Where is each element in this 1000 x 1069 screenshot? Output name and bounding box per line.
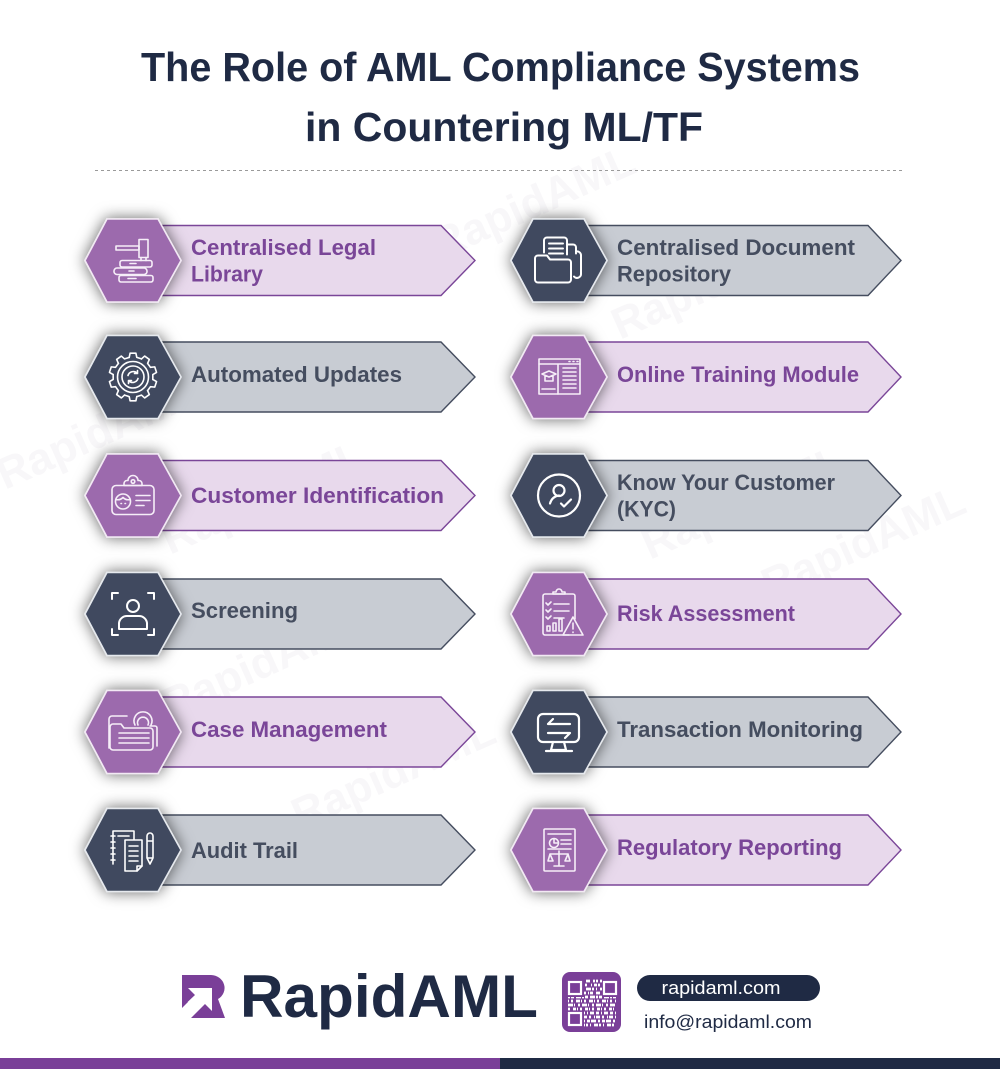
panel: Regulatory Reporting: Regulatory Reporting (617, 835, 842, 860)
panel: Case Management: Case Management (191, 717, 388, 742)
website pill: rapidaml.com (662, 978, 780, 998)
panel: Centralised Document Repository: Repository (617, 262, 732, 286)
panel: Transaction Monitoring (511, 690, 901, 774)
background watermarks: RapidAML (424, 136, 643, 269)
background watermarks (0, 136, 973, 839)
panel: Automated Updates: Automated Updates (191, 362, 402, 387)
background watermarks: RapidAML (634, 436, 853, 569)
panel: Know Your Customer (KYC): (KYC) (617, 496, 676, 522)
icon: document folder (535, 238, 581, 282)
icon: notebook, document and pencil (111, 831, 153, 871)
panel: Customer Identification: Customer Identification (191, 483, 444, 508)
panel: Centralised Legal Library: Library (191, 262, 264, 286)
panel: Centralised Document Repository (511, 219, 901, 302)
background watermarks: RapidAML (604, 216, 823, 349)
logo: RapidAML: RapidAML (240, 963, 538, 1030)
panel: Case Management (85, 690, 475, 774)
icon: logo mark (177, 975, 225, 1022)
title: The Role of AML Compliance Systems (141, 44, 860, 90)
footer bar (0, 1058, 1000, 1069)
panel: Customer Identification (85, 454, 475, 537)
panel: Online Training Module (511, 336, 901, 418)
icon: face scan person (112, 593, 154, 635)
icon: report with scales (544, 829, 575, 871)
icon: online course window (539, 359, 580, 394)
panel: Audit Trail (85, 808, 475, 892)
panel: Centralised Legal Library (85, 219, 475, 302)
background watermarks: RapidAML (154, 596, 373, 729)
icon: ID badge (112, 476, 154, 514)
title (141, 44, 860, 150)
panel: Online Training Module: Online Training Module (617, 362, 859, 387)
panel: Screening (85, 572, 475, 656)
icon: folder with gear (109, 712, 157, 750)
icon: gear with refresh arrows (108, 353, 158, 401)
QR code (562, 972, 621, 1032)
panel: Centralised Legal Library: Centralised Legal (191, 235, 376, 260)
panel: Know Your Customer (KYC) (511, 454, 901, 537)
title: in Countering ML/TF (305, 104, 703, 150)
background watermarks: RapidAML (754, 476, 973, 609)
panel: Centralised Document Repository: Centralised Document (617, 235, 856, 260)
panel: Transaction Monitoring: Transaction Monitoring (617, 717, 863, 742)
panel: Know Your Customer (KYC): Know Your Customer (617, 470, 835, 495)
icon: clipboard risk chart (543, 589, 583, 635)
background watermarks: RapidAML (154, 431, 373, 564)
icon: verified customer (538, 474, 580, 516)
panel: Screening: Screening (191, 598, 298, 623)
email text: info@rapidaml.com (644, 1012, 812, 1032)
panel: Audit Trail: Audit Trail (191, 838, 298, 863)
website pill (637, 975, 820, 1001)
background watermarks: RapidAML (284, 706, 503, 839)
panel: Regulatory Reporting (511, 808, 901, 892)
panel: Risk Assessment (511, 572, 901, 656)
panel: Automated Updates (85, 336, 475, 418)
icon: monitor with exchange arrows (538, 714, 579, 751)
icon: gavel and books (114, 240, 153, 282)
panel: Risk Assessment: Risk Assessment (617, 601, 796, 626)
